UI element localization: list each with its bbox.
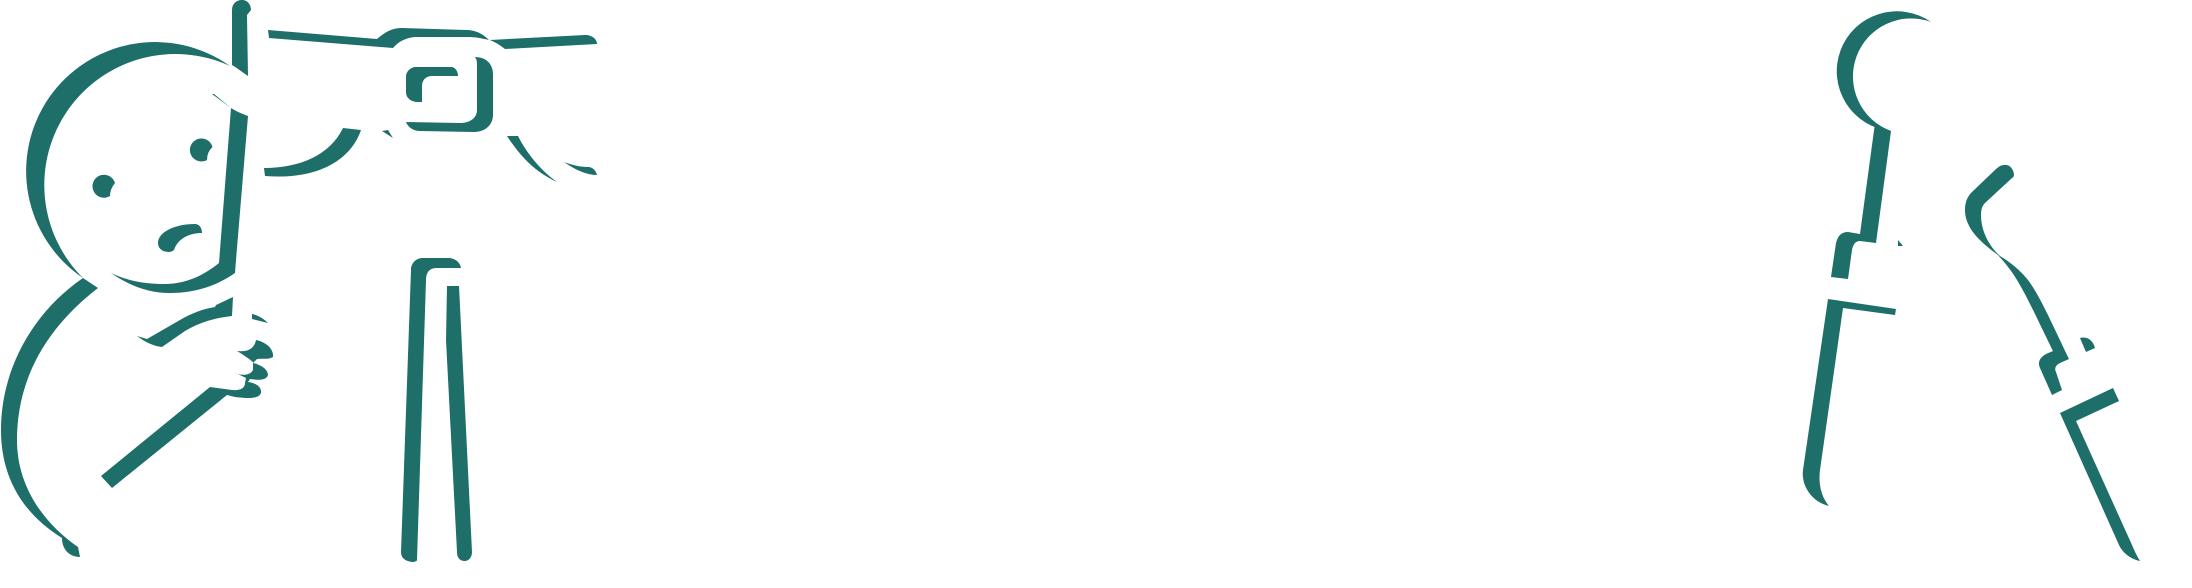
small camera notch xyxy=(382,130,393,138)
pole lower segment and chin curve xyxy=(111,108,248,293)
camera top band right xyxy=(490,35,597,49)
camera viewfinder corner xyxy=(406,67,458,102)
sleeve sliver xyxy=(252,314,268,323)
small triangle xyxy=(1898,240,1903,246)
tripod leg left xyxy=(401,258,461,562)
figure: left person xyxy=(1,0,273,557)
mouth xyxy=(158,224,202,252)
torso stroke xyxy=(1831,123,1891,279)
camera body right and bottom xyxy=(406,57,493,132)
raised arm and back xyxy=(1965,165,2069,395)
tripod leg right xyxy=(446,286,472,561)
left eye xyxy=(92,175,115,198)
head outline xyxy=(26,42,230,278)
camera top band left xyxy=(268,28,489,48)
trouser left leg xyxy=(1803,299,1896,506)
hand and forearm xyxy=(101,340,273,488)
hand piece xyxy=(2080,338,2095,352)
right eye xyxy=(190,138,212,161)
upper arm xyxy=(137,297,233,347)
head sliver xyxy=(212,94,231,108)
camera grip curve xyxy=(264,128,361,177)
camera strap end xyxy=(564,162,597,175)
trouser right leg xyxy=(2060,388,2140,561)
pole top segment xyxy=(232,0,251,76)
camera on tripod xyxy=(264,28,597,562)
figure: right person xyxy=(1803,11,2140,561)
body back outline xyxy=(1,278,98,557)
camera strap curve xyxy=(507,136,557,182)
head outline xyxy=(1837,11,1931,131)
